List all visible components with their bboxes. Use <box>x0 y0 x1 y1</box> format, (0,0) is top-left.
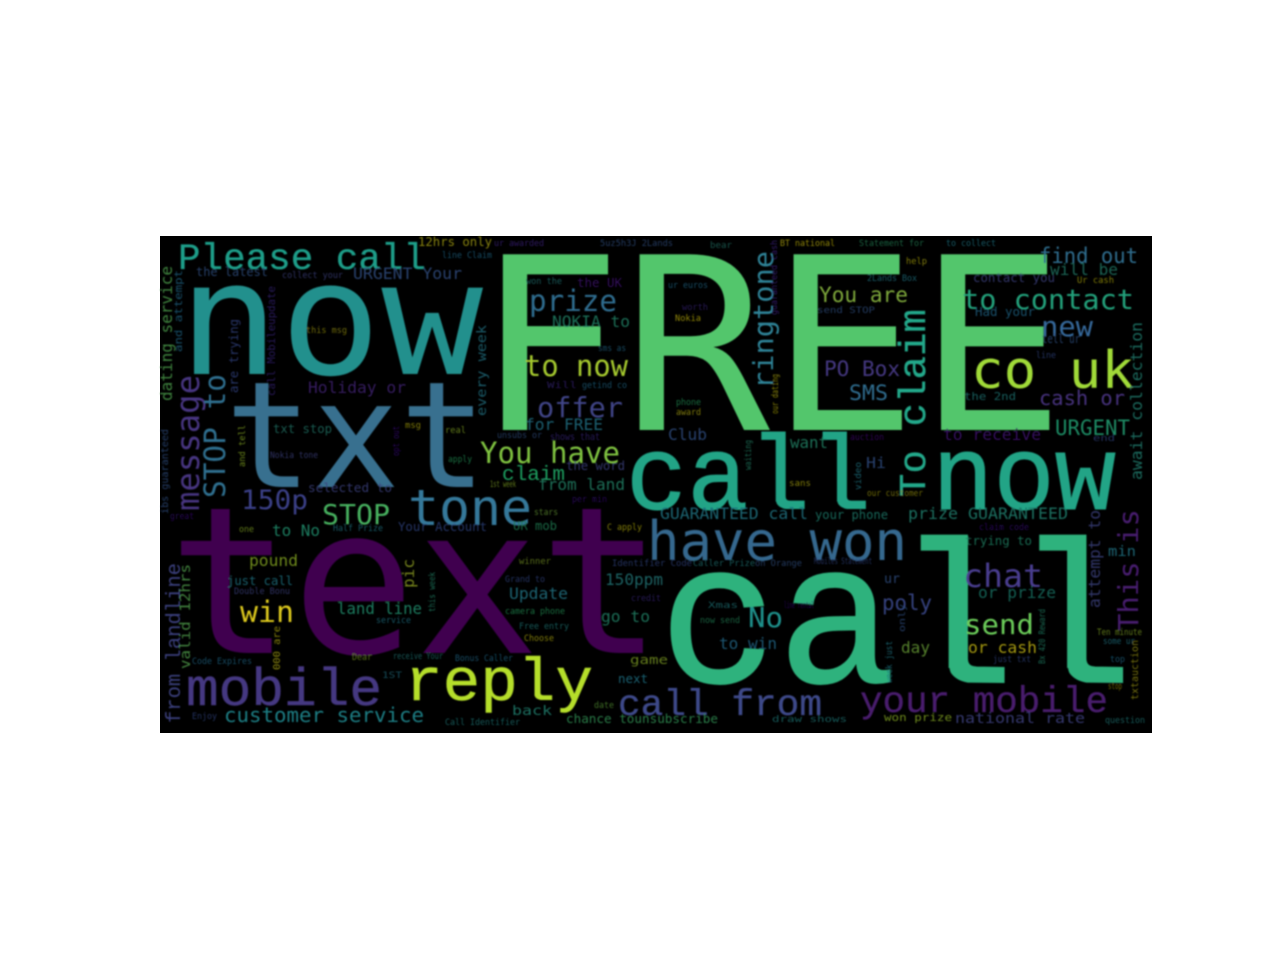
tiny words: Nokia <box>675 314 701 324</box>
word: reply: reply <box>405 651 593 719</box>
word: FREE: FREE <box>475 206 1065 487</box>
rotated small words: video <box>854 462 864 490</box>
words: call from: call from <box>618 685 822 727</box>
tiny words: apply <box>448 455 473 465</box>
small words: contact you <box>973 271 1055 285</box>
tiny words: Xmas <box>708 601 738 611</box>
rotated words: from landline: from landline <box>164 563 187 723</box>
tiny words: C apply <box>607 523 643 533</box>
medium small words: from land <box>538 475 625 494</box>
medium small words: GUARANTEED call <box>660 504 808 523</box>
tiny words: service <box>376 616 411 626</box>
tiny words: on Orange <box>755 559 802 569</box>
rotated small words: valid 12hrs <box>178 564 194 669</box>
rotated small words: attempt to <box>1085 510 1104 608</box>
medium small words: poly <box>882 591 932 615</box>
medium small words: game <box>630 653 668 667</box>
medium small words: to receive <box>943 425 1041 444</box>
medium small words: will be <box>1050 260 1118 279</box>
word: text: text <box>168 464 663 702</box>
medium small words: or cash <box>968 638 1037 657</box>
small words: your phone <box>815 508 888 522</box>
words: to now: to now <box>524 349 629 383</box>
tiny words: Dear <box>352 653 373 663</box>
medium small words: won prize <box>884 711 952 724</box>
small words: 12hrs only <box>418 235 492 249</box>
rotated small words: Bx 420 Reward <box>1038 609 1048 664</box>
medium small words: national rate <box>955 711 1085 727</box>
tiny words: Choose <box>524 634 554 644</box>
small words: txt stop <box>273 422 332 436</box>
small words: UR mob <box>513 519 557 533</box>
tiny words: Identifier Code <box>612 559 692 569</box>
tiny words: our customer <box>867 489 923 499</box>
tiny words: per min <box>572 495 607 505</box>
medium small words: Hi <box>866 454 886 472</box>
word: mobile: mobile <box>186 661 382 721</box>
words: to contact: to contact <box>962 283 1134 316</box>
rotated small words: are trying <box>227 319 241 393</box>
medium small words: land line <box>337 599 422 618</box>
word: prize: prize <box>529 284 617 318</box>
medium small words: prize GUARANTEED <box>908 504 1068 523</box>
tiny words: stars <box>534 508 558 518</box>
medium small words: want <box>790 433 828 452</box>
words: You have: You have <box>480 436 620 470</box>
tiny words: Grand to <box>505 575 545 585</box>
medium small words: Update <box>509 584 568 603</box>
rotated small words: week just <box>885 641 895 683</box>
rotated word: ringtone: ringtone <box>747 251 780 389</box>
tiny words: getind co <box>582 381 627 391</box>
words: call now: call now <box>626 421 1116 541</box>
words: Please call: Please call <box>178 239 426 281</box>
small words: the latest <box>196 265 268 279</box>
small words: trying to <box>965 534 1032 548</box>
small words: Your Account <box>398 520 487 534</box>
rotated small words: call Mobileupdate <box>265 286 278 396</box>
word: claim: claim <box>502 464 565 487</box>
tiny words: just txt <box>993 655 1031 665</box>
rotated small words: and attempt <box>172 270 185 352</box>
rotated small words: this week <box>428 572 438 612</box>
tiny words: winner <box>519 557 552 567</box>
word: URGENT: URGENT <box>1055 416 1130 440</box>
tiny words: ur awarded <box>494 239 544 249</box>
tiny words: 1st week <box>490 480 516 490</box>
words: your mobile: your mobile <box>860 682 1108 724</box>
tiny words: Double Bonu <box>234 587 290 597</box>
tiny words: top <box>1110 655 1125 665</box>
medium small words: URGENT Your <box>353 264 462 283</box>
tiny words: worth <box>682 303 708 313</box>
medium small words: 150ppm <box>605 570 663 589</box>
words: have won: have won <box>647 510 907 573</box>
tiny words: line rental <box>784 601 814 611</box>
rotated small words: waiting <box>744 440 754 470</box>
medium small words: Holiday or <box>308 378 406 397</box>
small words: the 2nd <box>964 390 1016 403</box>
tiny words: Bonus Caller <box>455 654 514 664</box>
tiny words: 1ST <box>382 671 403 681</box>
word: now: now <box>178 228 484 412</box>
tiny words: Half Prize <box>333 524 383 534</box>
small words: tell ur <box>1042 332 1080 346</box>
medium small words <box>249 260 1136 727</box>
tiny words: credit <box>631 594 661 604</box>
tiny words: this msg <box>306 326 347 336</box>
tiny words: send STOP <box>817 306 876 316</box>
medium small words: or prize <box>978 583 1056 602</box>
small words: Had your <box>975 305 1035 319</box>
tiny words: some ur <box>1103 637 1135 647</box>
word: tone: tone <box>408 479 532 537</box>
tiny words: line Claim <box>442 251 492 261</box>
medium small words: next <box>618 672 648 686</box>
small words <box>196 235 1080 588</box>
tiny words: camera phone <box>505 607 565 617</box>
word cloud words <box>157 206 1146 743</box>
word: call (large): call <box>659 514 1133 743</box>
tiny words: won the <box>526 277 562 287</box>
medium small words: back <box>512 704 552 719</box>
rotated words: STOP to: STOP to <box>198 374 232 498</box>
tiny words: sms as <box>598 344 626 354</box>
tiny words: Ur cash <box>1077 276 1114 286</box>
words: cash or: cash or <box>1039 386 1125 410</box>
word: new: new <box>1041 310 1093 343</box>
tiny words: line <box>1036 351 1056 361</box>
tiny words: Ten minute <box>1097 628 1142 638</box>
tiny words: claim code <box>979 523 1029 533</box>
medium small words: day <box>901 638 930 657</box>
small words: shows that <box>550 432 600 443</box>
medium small words: pound <box>249 551 298 570</box>
medium small words: NOKIA to <box>552 312 630 331</box>
medium small words: min <box>1108 544 1136 560</box>
tiny words: end <box>1093 434 1115 444</box>
tiny words: great <box>170 512 194 522</box>
tiny words: date <box>594 701 614 711</box>
medium small words: ur <box>884 572 900 587</box>
words: customer service: customer service <box>224 703 424 727</box>
tiny words: Nokia tone <box>270 451 318 461</box>
tiny words: Free entry <box>519 622 570 632</box>
word: win: win <box>240 595 294 629</box>
tiny words: bear <box>710 241 733 251</box>
small words: the word <box>566 459 625 473</box>
words: find out: find out <box>1039 244 1138 268</box>
medium small words: to No <box>272 521 320 540</box>
tiny words: to collect <box>946 239 996 249</box>
tiny words <box>170 239 1145 728</box>
medium small words: go to <box>601 607 650 626</box>
tiny words: now send <box>700 616 740 626</box>
tiny words: auction <box>850 433 884 443</box>
rotated small words: only <box>898 603 908 632</box>
rotated small words: ibs guaranteed <box>160 429 171 514</box>
rotated small words: and tell <box>238 425 248 467</box>
medium small words: for FREE <box>525 415 603 434</box>
rotated small words: txtauction <box>1130 640 1141 700</box>
tiny words: ur euros <box>668 281 708 291</box>
tiny words: help <box>906 257 927 267</box>
rotated small words: our dating <box>771 374 781 414</box>
rotated small words: await collection <box>1127 322 1146 480</box>
tiny words: unsubs or <box>497 431 543 441</box>
rotated small words: dating service <box>157 266 176 401</box>
tiny words: Will <box>547 381 577 391</box>
rotated small words: every week <box>475 325 490 416</box>
tiny words: Call Identifier <box>445 718 521 728</box>
rotated small words: opt out <box>392 426 402 456</box>
medium small words: chance tounsubscribe <box>566 711 718 726</box>
word: send: send <box>964 608 1034 641</box>
tiny words: 2Lands Box <box>867 274 918 284</box>
tiny words: draw shows <box>772 715 847 725</box>
small words: the UK <box>577 276 623 290</box>
tiny words: Enjoy <box>192 712 218 722</box>
word: txt: txt <box>225 350 487 522</box>
word: STOP: STOP <box>322 498 390 531</box>
rotated small words: 000 are <box>272 626 283 670</box>
small words: selected to <box>308 481 392 495</box>
tiny words: sans <box>789 479 811 489</box>
words: co uk: co uk <box>971 341 1134 401</box>
tiny words: 5uz5h3J 2Lands <box>600 239 673 249</box>
word: chat: chat <box>963 557 1043 595</box>
tiny words: one <box>239 525 254 535</box>
tiny words: Mobiles Statement <box>814 557 872 567</box>
tiny words: msg <box>405 421 421 431</box>
tiny words: collect your <box>282 271 344 281</box>
words: PO Box: PO Box <box>824 357 900 381</box>
rotated small words: pic <box>399 559 418 588</box>
medium small words: Club <box>668 425 707 444</box>
word: 150p: 150p <box>241 485 308 516</box>
tiny words: BT national <box>780 239 835 249</box>
rotated small words <box>157 240 1146 700</box>
tiny words: Code Expires <box>192 657 252 667</box>
tiny words: real <box>445 426 466 436</box>
word: offer: offer <box>537 391 623 424</box>
tiny words: Caller Prize <box>693 559 755 569</box>
word: No: No <box>748 601 783 634</box>
tiny words: award <box>676 408 701 418</box>
tiny words: question <box>1105 716 1145 726</box>
words: You are: You are <box>819 283 908 307</box>
tiny words: Statement for <box>859 239 925 249</box>
panel: black word cloud background <box>160 236 1152 733</box>
tiny words: stop <box>1108 682 1122 692</box>
rotated small words: guaranteed cash <box>770 240 780 315</box>
rotated words: This is: This is <box>1112 509 1145 631</box>
rotated word: message: message <box>169 375 207 511</box>
word: SMS: SMS <box>849 381 888 405</box>
medium small words: to win <box>719 634 777 653</box>
tiny words: receive Your <box>393 652 443 662</box>
tiny words: phone <box>676 398 701 408</box>
rotated words: To claim: To claim <box>894 309 937 497</box>
small words: just call <box>227 574 293 588</box>
